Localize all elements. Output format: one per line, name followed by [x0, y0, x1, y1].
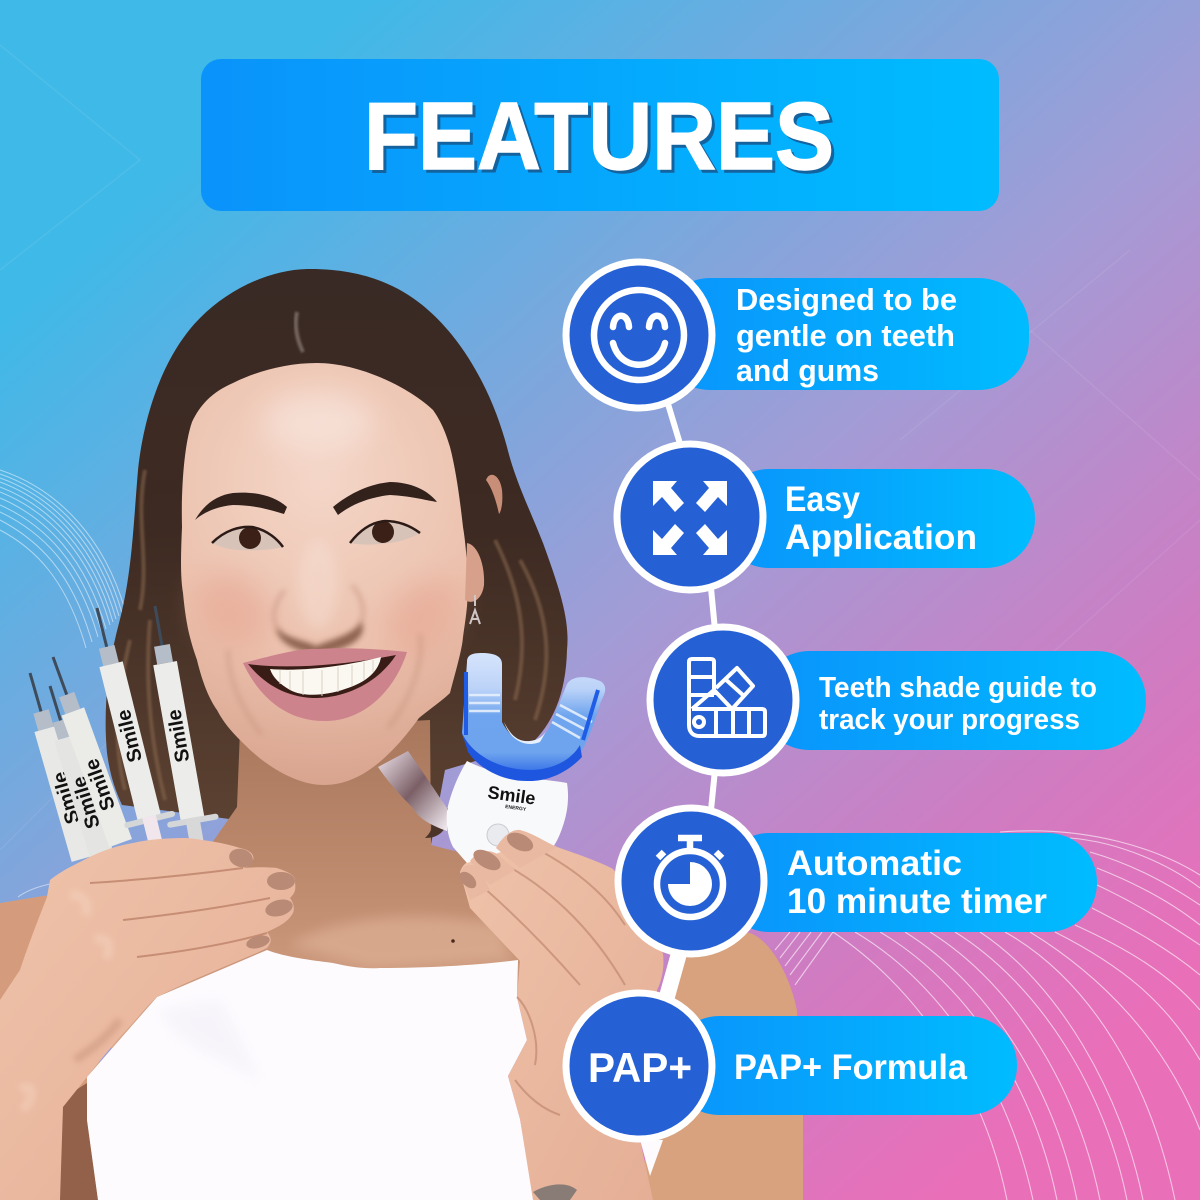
right shoulder: [640, 932, 803, 1200]
badge 4: [618, 808, 764, 954]
syringe 5: [129, 601, 223, 852]
feature 2: easy application: [617, 444, 1035, 590]
icon: shade guide: [689, 659, 765, 736]
badge 3: [650, 627, 796, 773]
syringe 3: Smile: [81, 756, 120, 813]
right hand and forearm: [460, 829, 663, 1200]
badge label: PAP+: [588, 1044, 692, 1091]
earring: [470, 595, 480, 624]
smile lines: [228, 634, 421, 735]
text 1: gentle on teeth: [736, 318, 955, 353]
nose wings: [274, 585, 363, 632]
feature 3: teeth shade guide: [650, 627, 1146, 773]
feature 4: automatic timer: [618, 808, 1097, 954]
syringe 5: Smile: [163, 708, 194, 764]
hair strands: [118, 470, 546, 800]
background wave lines left: [0, 470, 125, 897]
badge 5: [566, 993, 712, 1139]
text 5: PAP+ Formula: [734, 1048, 968, 1087]
fingers over device: [460, 830, 557, 900]
pill 5: [670, 1016, 1017, 1115]
right ear: [465, 543, 484, 602]
icon: smiley face: [594, 290, 684, 380]
badge 2: [617, 444, 763, 590]
face: [181, 363, 467, 785]
dark gap by arm: [58, 1083, 98, 1200]
upper ear: [486, 475, 502, 514]
tray ridges: [469, 695, 592, 738]
blue mouth tray: [462, 653, 605, 777]
title text: FEATURES: [364, 83, 834, 190]
tray blue glow: [462, 733, 582, 781]
text 3: track your progress: [819, 704, 1080, 736]
whitening device: [447, 653, 605, 863]
right eyebrow: [333, 482, 437, 515]
syringe 3: [42, 653, 132, 847]
tray side edges: [466, 672, 598, 740]
tray inner crystal: [504, 722, 548, 744]
collarbone highlight: [290, 917, 510, 968]
icon: stopwatch: [657, 838, 723, 917]
hair parting: [296, 312, 303, 352]
icon: expand arrows: [653, 481, 727, 555]
pill 4: [720, 833, 1097, 932]
title banner: [201, 59, 999, 211]
text 3: [819, 672, 1097, 736]
left hand wrist shadow: [75, 1020, 120, 1060]
left eye: [212, 527, 283, 550]
text 1: [736, 282, 957, 388]
hair tail at neck: [420, 790, 450, 838]
feature 5: PAP+ formula: [566, 993, 1017, 1139]
background diagonal light lines: [0, 45, 1200, 850]
nose highlight: [298, 540, 338, 630]
feature 1: gentle on teeth and gums: [566, 262, 1029, 408]
text 4: Automatic: [787, 844, 962, 883]
right eye: [350, 521, 420, 545]
syringes: [18, 601, 223, 862]
left shoulder: [0, 890, 100, 1200]
left hand finger lines: [90, 868, 270, 957]
syringe 4: Smile: [113, 707, 147, 764]
device base: [447, 761, 568, 863]
text 2: Easy: [785, 480, 860, 519]
device handle: [378, 751, 447, 831]
text 2: Application: [785, 518, 977, 557]
syringe 4: [72, 602, 181, 852]
nose shadow: [276, 622, 363, 654]
neck and chest: [110, 720, 560, 1060]
forehead highlight: [263, 392, 373, 452]
lips: [243, 648, 407, 721]
left hand: [0, 838, 295, 1200]
title shadow: FEATURES: [367, 86, 837, 193]
syringe 1: Smile: [49, 769, 85, 826]
text 1: Designed to be: [736, 282, 957, 317]
text 2: [785, 480, 977, 557]
woman holding products: [0, 269, 803, 1200]
device logo small: ENERGY: [505, 804, 527, 813]
top fold shade: [160, 1000, 260, 1080]
pill 1: [660, 278, 1029, 390]
text 1: and gums: [736, 353, 879, 388]
syringe 1: [18, 670, 95, 862]
badge 1: [566, 262, 712, 408]
tooth lines: [280, 660, 373, 696]
background wave lines right: [775, 831, 1200, 1200]
right hand finger lines: [475, 840, 625, 1115]
left hand knuckle highlights: [20, 895, 109, 1110]
device logo: Smile: [486, 782, 537, 809]
right hand nails: [457, 829, 536, 891]
pill 2: [720, 469, 1035, 568]
text 4: [787, 844, 1047, 921]
left eyebrow: [195, 493, 287, 520]
text 4: 10 minute timer: [787, 882, 1047, 921]
left hand nails: [227, 846, 295, 951]
device button: [487, 824, 509, 846]
cheek blush: [195, 573, 460, 660]
white top right strap: [640, 1140, 663, 1176]
wrist tattoo: [533, 1184, 577, 1200]
chest mole: [451, 939, 455, 943]
connector lines: [666, 404, 715, 1000]
hair: [106, 269, 568, 850]
syringe 2: [39, 682, 114, 861]
pill 3: [760, 651, 1146, 750]
teeth: [270, 657, 381, 695]
mouth opening: [248, 655, 396, 698]
syringe 2: Smile: [68, 774, 105, 831]
text 3: Teeth shade guide to: [819, 672, 1097, 704]
white top: [87, 950, 534, 1200]
